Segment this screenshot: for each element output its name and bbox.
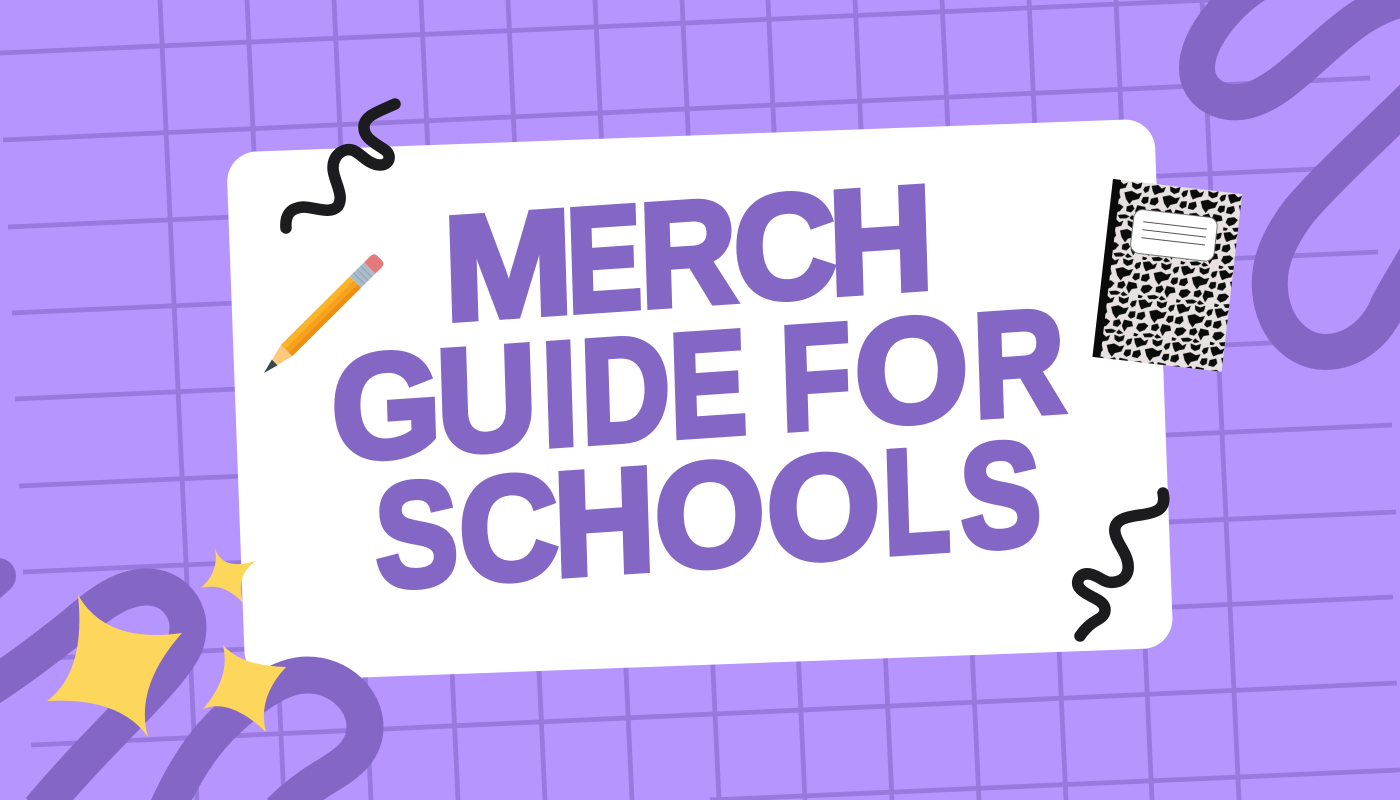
title line: SCHOOLS: H: [551, 435, 657, 608]
title line: GUIDE FOR: E: [667, 300, 749, 470]
title line: MERCH: E: [564, 173, 644, 344]
title line: GUIDE FOR: [329, 277, 1067, 493]
title line: MERCH: M: [441, 178, 575, 353]
title line: GUIDE FOR: G: [329, 319, 443, 492]
icon: pencil: [258, 252, 385, 379]
icon: small star: [201, 545, 256, 603]
squiggle: bottom right: [1078, 493, 1164, 636]
title line: GUIDE FOR: R: [971, 278, 1067, 449]
title line: MERCH: R: [637, 168, 739, 340]
white card: [226, 119, 1174, 682]
title line: SCHOOLS: L: [880, 416, 952, 586]
title line: SCHOOLS: C: [456, 442, 561, 615]
title line: GUIDE FOR: O: [852, 285, 971, 457]
title line: GUIDE FOR: D: [578, 303, 673, 475]
title line: MERCH: H: [826, 155, 936, 327]
icon: composition notebook: [1092, 179, 1242, 372]
title line: SCHOOLS: O: [764, 422, 883, 594]
blob: top right lower: [1270, 90, 1400, 352]
icon: medium star: [203, 645, 286, 732]
blob: bottom left second: [160, 675, 365, 800]
title line: MERCH: [441, 153, 936, 353]
blob: top right upper: [1197, 0, 1400, 102]
title line: MERCH: C: [731, 160, 839, 333]
title line: SCHOOLS: S: [372, 448, 460, 620]
title line: GUIDE FOR: U: [434, 314, 539, 485]
blob: bottom left large: [0, 587, 188, 800]
title line: GUIDE FOR: F: [778, 293, 853, 462]
title line: GUIDE FOR: I: [539, 310, 581, 478]
title: [329, 153, 1067, 620]
icon: large star: [47, 595, 182, 737]
title line: SCHOOLS: [372, 409, 1043, 620]
squiggle: top: [286, 104, 395, 228]
title line: SCHOOLS: O: [652, 428, 767, 601]
title line: SCHOOLS: S: [957, 409, 1043, 581]
